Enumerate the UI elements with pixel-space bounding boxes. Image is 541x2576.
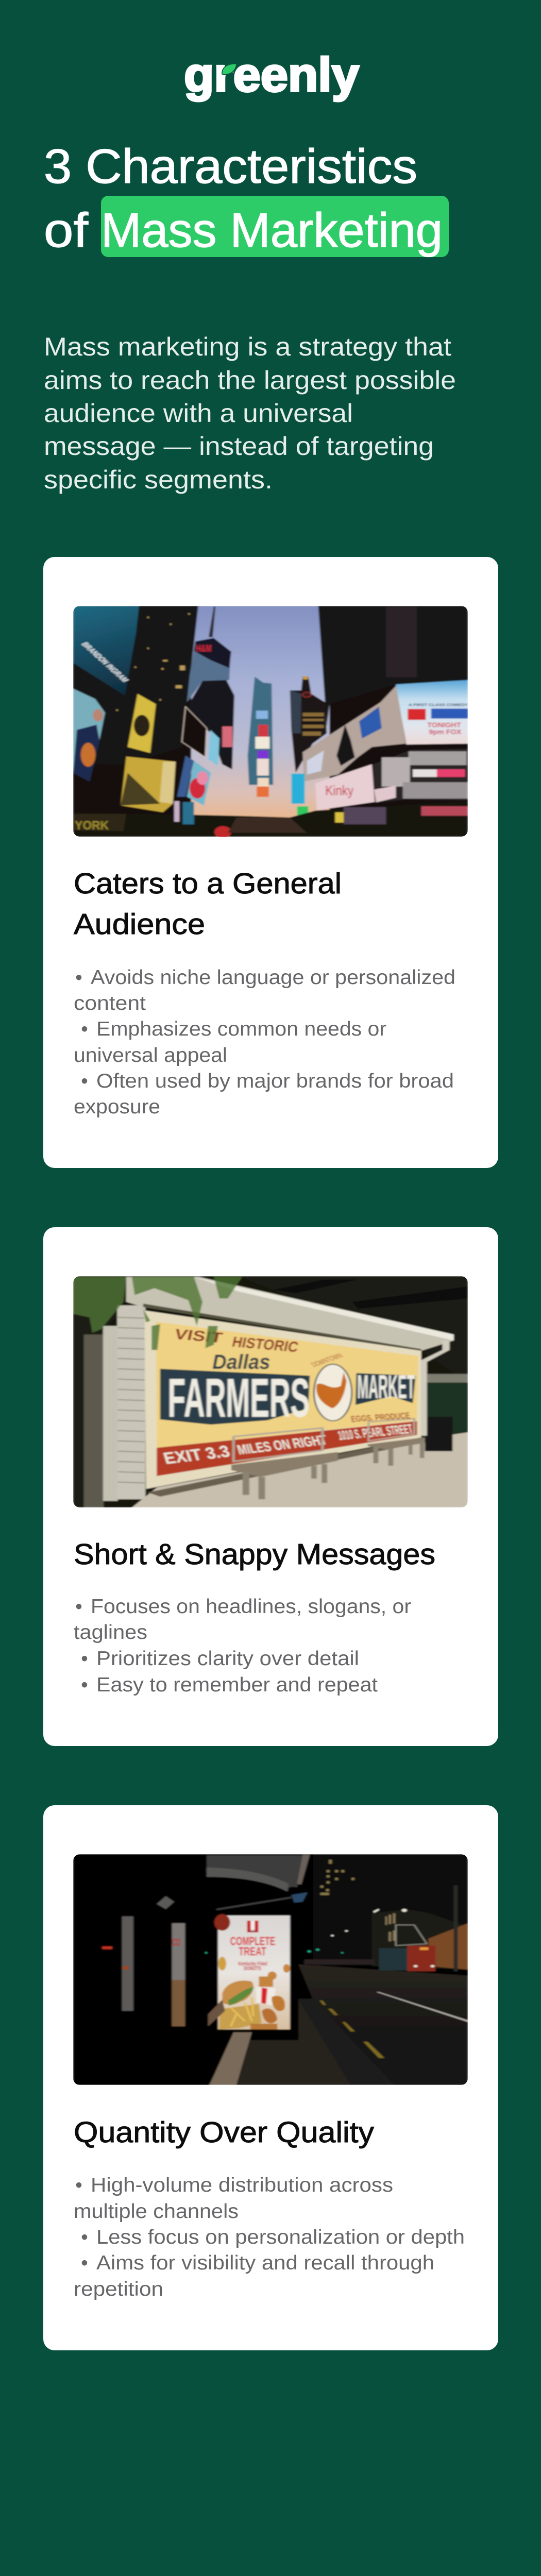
photo: bus shelter ad at night: CO [172, 1936, 180, 1948]
heading [74, 867, 342, 941]
bullet list: universal appeal [74, 1044, 227, 1066]
title: 3 Characteristics [44, 139, 417, 193]
bullet list: • [81, 1070, 88, 1092]
photo: bus shelter ad at night: COMPLETE [230, 1934, 275, 1948]
panel: caters to a general audience [43, 557, 498, 1168]
icon: green leaf [222, 64, 236, 75]
bullet list: • [75, 1596, 82, 1618]
bullet list: • [81, 1648, 88, 1670]
photo: Times Square billboards: Kinky [325, 783, 354, 798]
heading: Audience [74, 908, 205, 941]
bullet list: content [74, 992, 146, 1014]
bullet list [74, 2174, 465, 2300]
intro paragraph [44, 332, 456, 494]
bullet list [74, 967, 455, 1118]
bullet list: multiple channels [74, 2200, 239, 2223]
bullet list: • [81, 2252, 88, 2274]
bullet list: • [75, 967, 82, 989]
bullet list: • [81, 1018, 88, 1040]
photo: Dallas Farmers Market mural: VISIT [173, 1326, 224, 1346]
intro paragraph: aims to reach the largest possible [44, 366, 456, 395]
photo: Dallas Farmers Market mural: MILES ON RIGHT [235, 1432, 329, 1458]
bullet list: Prioritizes clarity over detail [96, 1648, 359, 1670]
photo: bus shelter ad at night: KFC [249, 1929, 256, 1933]
intro paragraph: Mass marketing is a strategy that [44, 332, 451, 361]
title [44, 139, 449, 257]
bullet list: Easy to remember and repeat [96, 1674, 378, 1696]
bullet list: Focuses on headlines, slogans, or [91, 1596, 411, 1618]
bullet list: • [75, 2174, 82, 2196]
title: Mass Marketing [101, 203, 443, 257]
panel: quantity over quality [43, 1805, 498, 2350]
panel: short and snappy messages [43, 1227, 498, 1746]
heading: Quantity Over Quality [74, 2116, 375, 2149]
photo: bus shelter ad at night: DONUTS [244, 1965, 261, 1972]
photo: Dallas Farmers Market mural [73, 1276, 468, 1507]
bullet list: • [81, 2226, 88, 2248]
photo: Times Square billboards: YORK [75, 818, 109, 832]
bullet list: Avoids niche language or personalized [91, 967, 455, 989]
bullet list: repetition [74, 2278, 163, 2300]
heading: Short & Snappy Messages [74, 1538, 435, 1571]
photo: bus shelter ad at night: TREAT [239, 1944, 266, 1958]
photo: Dallas Farmers Market mural: HISTORIC [230, 1334, 300, 1355]
bullet list: exposure [74, 1096, 160, 1118]
photo: Dallas Farmers Market mural: Dallas [212, 1350, 270, 1374]
heading: Caters to a General [74, 867, 342, 900]
logo: greenly: greenly [184, 48, 359, 101]
intro paragraph: message — instead of targeting [44, 432, 434, 461]
bullet list: Less focus on personalization or depth [96, 2226, 465, 2248]
photo: Times Square billboards: H&M [196, 642, 211, 654]
bullet list: High-volume distribution across [91, 2174, 393, 2196]
photo: Times Square billboards: BRANDON INGRAM [79, 641, 130, 683]
photo: bus shelter ad at night: Kentucky Fried [239, 1960, 267, 1967]
intro paragraph: audience with a universal [44, 399, 353, 428]
bullet list: • [81, 1674, 88, 1696]
title: of [44, 203, 89, 257]
title highlight [101, 196, 449, 257]
bullet list: taglines [74, 1621, 147, 1643]
bullet list: Emphasizes common needs or [96, 1018, 386, 1040]
bullet list: Often used by major brands for broad [96, 1070, 454, 1092]
photo: Dallas Farmers Market mural: EGGS, PRODUCE [350, 1410, 411, 1424]
intro paragraph: specific segments. [44, 465, 273, 494]
bullet list [74, 1596, 411, 1696]
photo: bus shelter ad at night [73, 1854, 468, 2085]
infographic canvas [43, 56, 498, 2350]
photo: Times Square billboards [73, 606, 468, 837]
photo: Dallas Farmers Market mural: DOWNTOWN [309, 1351, 345, 1368]
bullet list: Aims for visibility and recall through [96, 2252, 434, 2274]
photo: Dallas Farmers Market mural: EXIT 3.3 [161, 1442, 232, 1468]
